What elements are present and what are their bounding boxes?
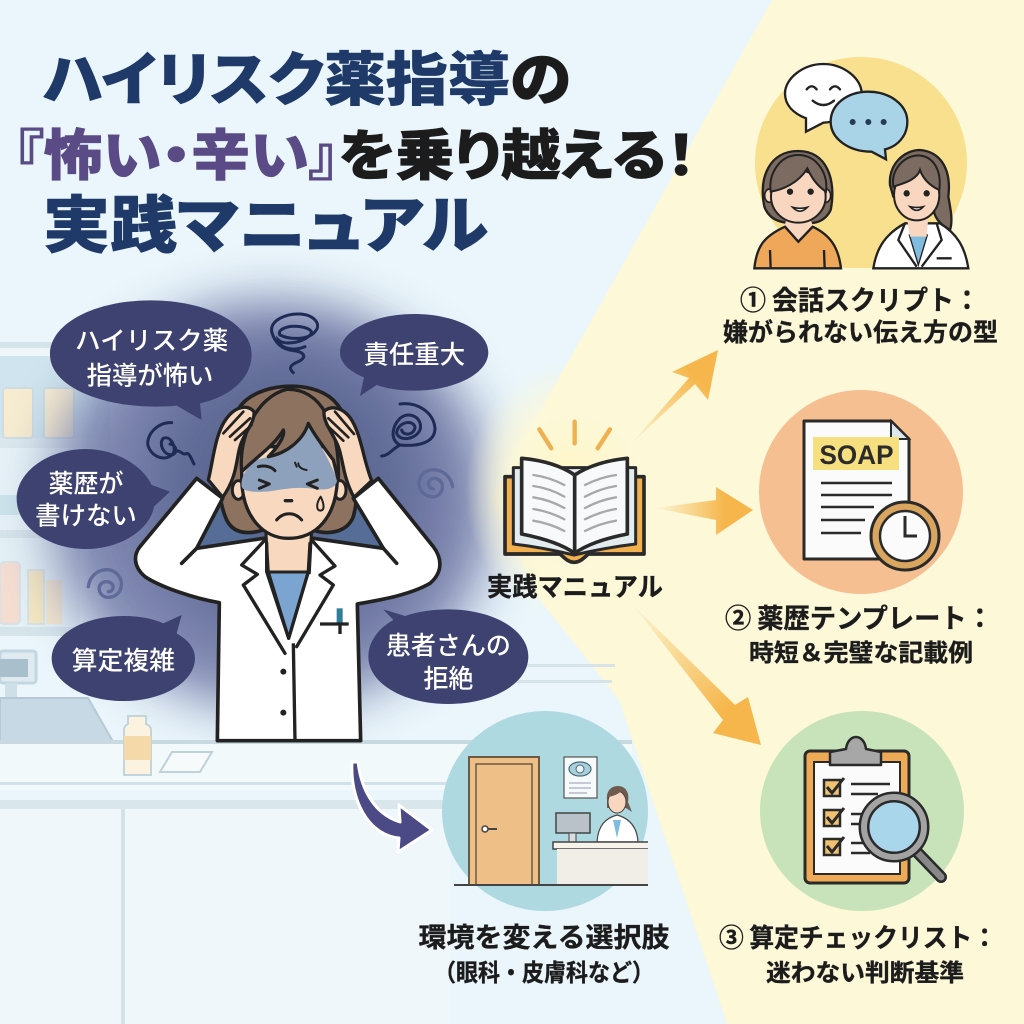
clinic illustration: [454, 757, 653, 885]
bubble: ハイリスク薬指導が怖い: 指導が怖い: [87, 356, 213, 392]
yellow circle: [755, 57, 967, 269]
inner shirt: [268, 572, 308, 638]
page text lines: [533, 475, 616, 531]
floor line: [454, 884, 648, 886]
bubble: ハイリスク薬指導が怖い: [50, 300, 252, 420]
panel: billing checklist: [719, 711, 997, 988]
clipboard paper: [814, 762, 900, 874]
green circle: [760, 711, 964, 911]
bubble: ハイリスク薬指導が怖い: ハイリスク薬: [75, 321, 228, 357]
caption: ② 薬歴テンプレート：: [725, 597, 993, 636]
caption: 時短＆完璧な記載例: [749, 633, 973, 668]
spiral left: [88, 570, 121, 597]
swirl left: [148, 423, 194, 464]
document fold: [891, 421, 909, 439]
caption: [723, 279, 998, 349]
spine: [569, 475, 580, 553]
back hair: [219, 386, 358, 533]
front hair: [241, 389, 338, 480]
neck: [266, 528, 312, 573]
face: [242, 447, 337, 538]
checklist rows: [824, 778, 890, 855]
clipboard: [805, 751, 909, 883]
magnifier: [864, 797, 941, 877]
text lines: [821, 483, 892, 533]
pocket and pen: [320, 608, 349, 634]
patient: [754, 151, 841, 268]
spiral right: [419, 470, 453, 497]
gloom shade over eyes: [242, 423, 337, 492]
smile: [807, 86, 840, 105]
caption: （眼科・皮膚科など）: [434, 953, 654, 988]
bubble: 患者さんの拒絶: 拒絶: [423, 660, 473, 696]
cover: [505, 477, 644, 562]
bubble: 算定複雑: [52, 615, 195, 701]
door: [469, 757, 539, 885]
document: [804, 421, 909, 559]
bubble: 薬歴が書けない: [17, 449, 170, 549]
bubble: 患者さんの拒絶: [368, 609, 528, 704]
pharmacist: [873, 150, 968, 268]
title: 実践マニュアル: [43, 175, 488, 265]
pharmacy shelves background: [0, 342, 615, 683]
clock: [871, 502, 939, 570]
panel: medication record template: [725, 390, 993, 668]
coat placket: [293, 643, 295, 741]
caption: 迷わない判断基準: [766, 953, 964, 988]
bubble: 薬歴が書けない: 書けない: [35, 496, 137, 532]
panel: changing environment: [418, 711, 670, 988]
blue speech bubble: [831, 92, 907, 159]
panel: conversation script: [723, 57, 998, 349]
white speech bubble: [785, 64, 862, 132]
bubble: 責任重大: [340, 314, 488, 396]
caption: ① 会話スクリプト：: [740, 279, 980, 318]
page block: [513, 468, 636, 555]
bubble: 責任重大: 責任重大: [363, 335, 465, 371]
right hand: [324, 408, 372, 497]
facial expression: [258, 463, 324, 520]
caption: 環境を変える選択肢: [418, 916, 670, 955]
title: [14, 33, 696, 265]
teal circle: [442, 711, 648, 911]
conversation illustration: [754, 64, 968, 268]
open pages: [522, 458, 627, 553]
register and counter: [0, 651, 640, 1024]
title: 『怖い・辛い』 を乗り越える！: [14, 111, 696, 191]
sleeve fold lines: [182, 548, 397, 563]
book icon: [505, 422, 644, 562]
arrow to conversation script: [630, 350, 718, 445]
title: ハイリスク薬指導 の: [43, 33, 571, 117]
caption: [725, 597, 993, 668]
caption: [719, 918, 997, 988]
swirl top: [272, 314, 318, 373]
dark shapes between arms and hair: [197, 503, 383, 548]
left hand: [208, 407, 254, 497]
collars: [242, 540, 335, 653]
swirl right: [382, 404, 435, 456]
clinic staff: [597, 786, 638, 842]
bubble: 薬歴が書けない: 薬歴が: [48, 464, 123, 500]
dark anxiety haze: [50, 300, 494, 710]
lab coat: [135, 478, 440, 741]
SOAP label: SOAP: [820, 440, 894, 470]
reception desk: [553, 842, 653, 885]
clip: [830, 737, 881, 765]
arrow to template: [655, 487, 753, 535]
eye poster: [564, 757, 597, 798]
caption: [418, 916, 670, 988]
bubble: 患者さんの拒絶: 患者さんの: [386, 626, 511, 662]
light rays: [539, 422, 610, 448]
curved arrow to new environment: [352, 762, 432, 852]
coat buttons: [280, 669, 286, 716]
caption: ③ 算定チェックリスト：: [719, 918, 997, 955]
ears: [232, 481, 346, 499]
dots: [850, 119, 887, 125]
yellow glow behind book: [465, 360, 685, 620]
caption: 嫌がられない伝え方の型: [723, 313, 998, 349]
arrow to checklist: [632, 604, 761, 745]
monitor: [556, 813, 590, 842]
book label: 実践マニュアル: [487, 567, 663, 604]
bubble: 算定複雑: 算定複雑: [72, 641, 175, 677]
peach circle: [759, 390, 963, 594]
worried pharmacist scene: [17, 300, 528, 741]
